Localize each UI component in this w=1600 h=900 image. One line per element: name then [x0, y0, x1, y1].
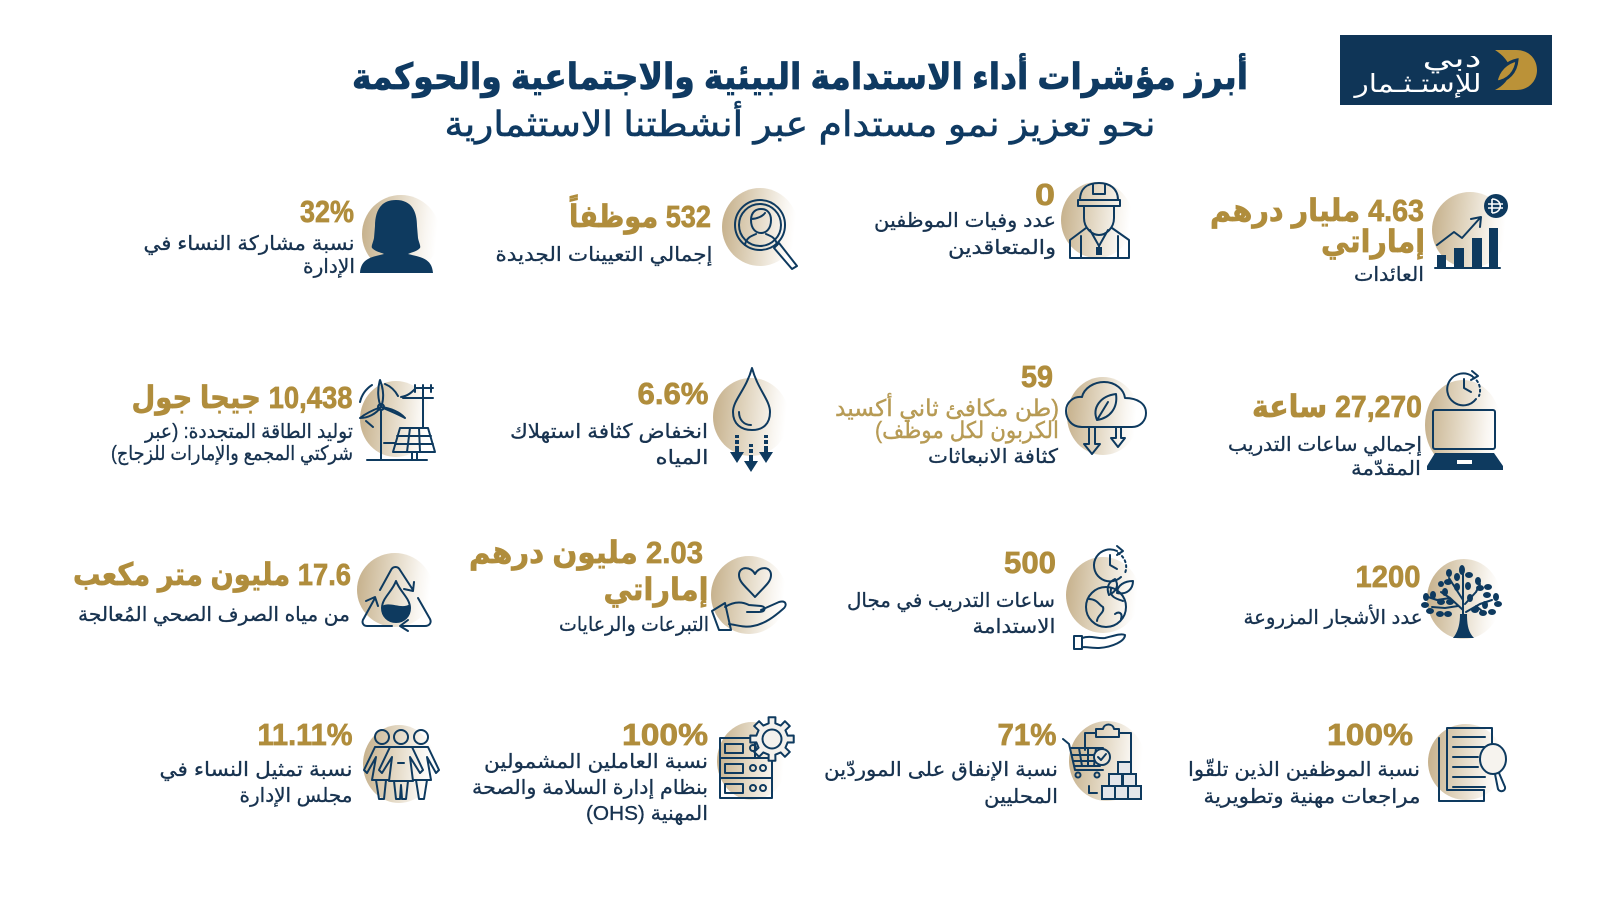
panel: fatalities — [874, 177, 1133, 259]
value: 532 موظفاً — [569, 194, 711, 235]
value: 6.6% — [638, 376, 708, 411]
unit line 1: (طن مكافئ ثاني أكسيد — [835, 393, 1059, 422]
label: عدد الأشجار المزروعة — [1244, 605, 1422, 629]
icon: tree — [1421, 559, 1502, 639]
label line 2: والمتعاقدين — [948, 237, 1056, 259]
panel: women on board — [160, 717, 439, 807]
logo — [1340, 35, 1552, 105]
label line 2: الاستدامة — [972, 616, 1056, 638]
panel: water intensity — [510, 368, 789, 472]
logo mark — [1495, 50, 1537, 90]
panel: women in management — [144, 194, 440, 278]
label line 2: مراجعات مهنية وتطويرية — [1204, 786, 1420, 808]
label line 1: نسبة الموظفين الذين تلقّوا — [1188, 758, 1420, 781]
value: 11.11% — [258, 717, 352, 752]
icon: laptop and clock — [1425, 371, 1503, 470]
icon: water drop with down arrows — [713, 368, 789, 472]
label line 1: نسبة العاملين المشمولين — [484, 751, 708, 773]
panel: treated wastewater — [73, 553, 433, 631]
value: 32% — [300, 194, 354, 229]
label line 1: عدد وفيات الموظفين — [874, 210, 1056, 232]
label line 3: المهنية (OHS) — [586, 803, 708, 825]
label: التبرعات والرعايات — [559, 614, 709, 636]
label line 1: نسبة تمثيل النساء في — [160, 759, 352, 782]
label line 2: الإدارة — [303, 256, 355, 278]
title line 1: أبرز مؤشرات أداء الاستدامة البيئية والاجتماعية والحوكمة — [352, 53, 1248, 98]
label line 2: بنظام إدارة السلامة والصحة — [472, 777, 708, 800]
icon: person under magnifier — [722, 188, 798, 269]
panel: trees planted — [1244, 559, 1502, 639]
label: من مياه الصرف الصحي المُعالجة — [78, 604, 350, 627]
label line 1: انخفاض كثافة استهلاك — [510, 421, 708, 443]
value: 500 — [1004, 545, 1056, 580]
logo wordmark bottom: للإستـثـمار — [1352, 70, 1482, 98]
label line 1: توليد الطاقة المتجددة: (عبر — [144, 421, 353, 443]
value: 27,270 ساعة — [1252, 389, 1422, 424]
title line 2: نحو تعزيز نمو مستدام عبر أنشطتنا الاستثمارية — [444, 101, 1156, 145]
value: 17.6 مليون متر مكعب — [73, 557, 351, 593]
panel: local suppliers — [824, 717, 1145, 808]
value: 59 — [1021, 359, 1053, 394]
icon: recycled water drop — [357, 553, 433, 631]
label line 1: نسبة الإنفاق على الموردّين — [824, 759, 1058, 781]
label line 1: إجمالي ساعات التدريب — [1228, 434, 1422, 457]
panel: performance reviews — [1188, 717, 1506, 808]
unit line 2: الكربون لكل موظف) — [875, 417, 1059, 444]
value: 100% — [1327, 717, 1413, 752]
label line 2: شركتي المجمع والإمارات للزجاج) — [111, 443, 353, 466]
value: 71% — [998, 717, 1056, 752]
label line 2: المقدّمة — [1351, 458, 1421, 480]
panel: revenue — [1210, 192, 1508, 286]
label: إجمالي التعيينات الجديدة — [496, 244, 712, 267]
value: 10,438 جيجا جول — [131, 380, 352, 416]
label line 2: المياه — [656, 447, 708, 469]
icon: three women — [363, 725, 439, 803]
icon: clock, globe and hand — [1066, 546, 1140, 649]
label: كثافة الانبعاثات — [928, 446, 1058, 468]
icon: cart, clipboard and boxes — [1063, 721, 1145, 801]
icon: documents with magnifier — [1428, 724, 1506, 801]
value line 1: 2.03 مليون درهم — [469, 535, 703, 571]
panel: new hires — [496, 188, 798, 269]
value line 2: إماراتي — [1321, 224, 1425, 260]
label line 2: المحليين — [984, 786, 1058, 808]
icon: revenue growth chart — [1432, 192, 1508, 268]
icon: cloud with leaf and arrows — [1066, 377, 1146, 455]
value: 1200 — [1356, 559, 1420, 594]
label: العائدات — [1354, 264, 1424, 286]
panel: sustainability training — [847, 545, 1140, 649]
panel: training hours — [1228, 371, 1503, 480]
title — [352, 53, 1248, 145]
icon: worker with helmet — [1061, 182, 1133, 258]
icon: heart over hand — [711, 556, 787, 634]
panel: renewable energy — [111, 380, 435, 466]
label line 2: مجلس الإدارة — [240, 785, 352, 807]
value: 4.63 مليار درهم — [1210, 193, 1424, 229]
value line 2: إماراتي — [604, 572, 708, 608]
icon: server rack with gear — [717, 717, 794, 800]
icon: wind turbine and solar panel — [360, 380, 435, 460]
label line 1: نسبة مشاركة النساء في — [144, 233, 354, 256]
logo wordmark top: دبي — [1422, 43, 1482, 73]
value: 0 — [1035, 177, 1055, 212]
icon: woman silhouette — [360, 195, 440, 273]
value: 100% — [622, 717, 708, 752]
panel: OHS coverage — [472, 717, 794, 825]
label line 1: ساعات التدريب في مجال — [847, 590, 1055, 613]
panel: emissions — [835, 359, 1146, 468]
panel: donations — [469, 535, 787, 636]
